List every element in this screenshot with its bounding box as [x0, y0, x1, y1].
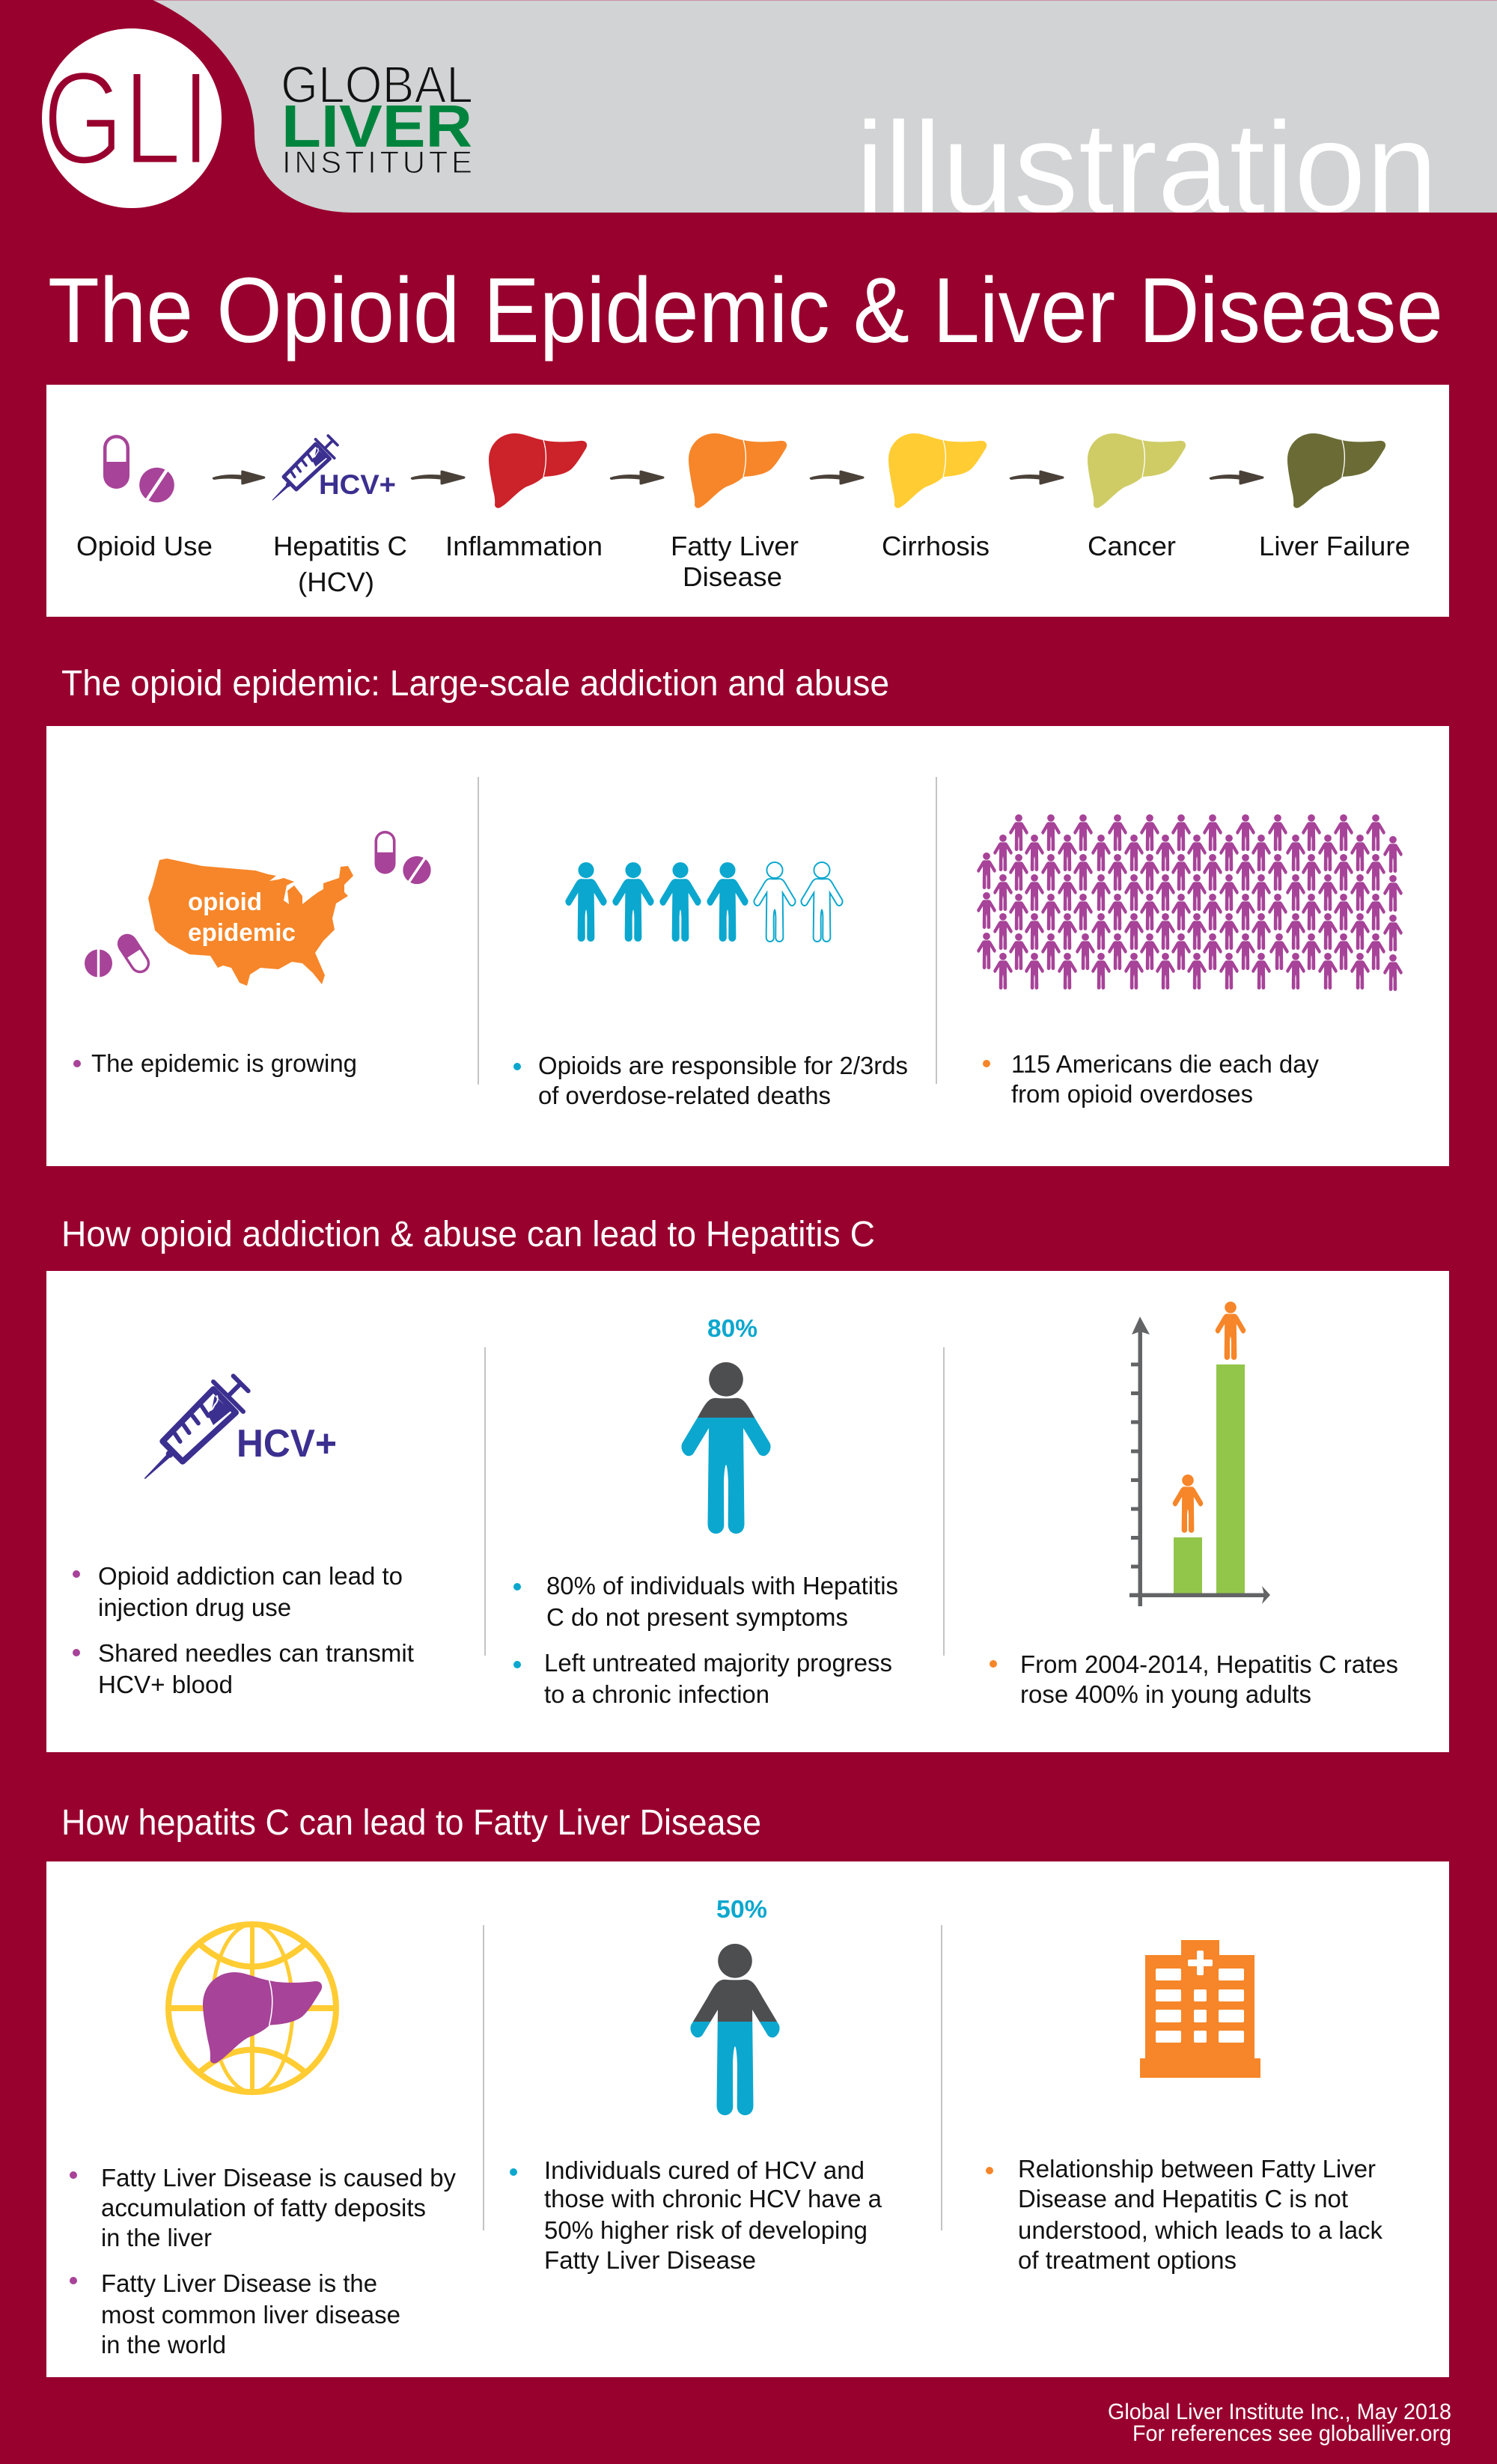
arrow: [1010, 472, 1063, 484]
map: USA with label: opioid: [188, 888, 262, 915]
label: hepatitis C: (HCV): [298, 567, 374, 597]
text: treatment options: Disease and Hepatitis C is not: [1018, 2185, 1348, 2213]
text: chronic infection: to a chronic infection: [544, 1680, 769, 1708]
text: injection drug use: Opioid addiction can lead to: [98, 1562, 403, 1590]
logo wordmark: Global Liver Institute: INSTITUTE: [282, 144, 472, 180]
header band: [153, 0, 1497, 213]
text: chronic infection: Left untreated majority progress: [544, 1649, 892, 1677]
map: USA with label: epidemic: [188, 918, 296, 946]
label: cancer: Cancer: [1088, 531, 1176, 561]
text: epidemic growing: The epidemic is growing: [91, 1049, 357, 1077]
text: 400% rise: [990, 1650, 1398, 1708]
icon: syringe HCV+: HCV+: [319, 469, 396, 500]
text: most common: [70, 2269, 400, 2358]
text: most common: in the world: [101, 2331, 226, 2358]
illustration word: illustration: [856, 94, 1438, 240]
arrow: [411, 472, 464, 484]
footer credits: For references see globalliver.org: [1132, 2421, 1451, 2446]
icon: dark liver: [1287, 433, 1385, 508]
label: cirrhosis: Cirrhosis: [882, 531, 990, 561]
panel: hepatitis C: [46, 1271, 1449, 1752]
label: fatty liver disease: [671, 531, 799, 592]
icon: yellow liver: [888, 433, 987, 508]
heading: opioid epidemic: The opioid epidemic: Large-scale addiction and abuse: [61, 664, 889, 704]
label: fatty liver disease: Disease: [683, 561, 782, 592]
icon: syringe HCV+: HCV+: [237, 1422, 337, 1466]
chart: rising hepatitis C rates: [1129, 1302, 1270, 1606]
heading: hepatitis C: How opioid addiction & abuse can lead to Hepatitis C: [61, 1215, 875, 1254]
stat: 50%: 50%: [716, 1895, 767, 1923]
icon: person 50% filled: [690, 1944, 780, 2115]
heading: fatty liver: How hepatits C can lead to Fatty Liver Disease: [61, 1803, 761, 1843]
text: chronic infection: [513, 1649, 892, 1708]
label: hepatitis C: Hepatitis C: [273, 531, 407, 561]
text: 400% rise: rose 400% in young adults: [1020, 1680, 1311, 1708]
text: injection drug use: injection drug use: [98, 1594, 291, 1621]
panel: disease progression: [46, 385, 1449, 617]
text: 80% no symptoms: 80% of individuals with Hepatitis: [546, 1572, 898, 1600]
text: 50% higher risk: 50% higher risk of developing: [544, 2216, 868, 2244]
icon: globe with liver: [168, 1924, 336, 2092]
icon: pale liver: [1088, 433, 1186, 508]
text: 50% higher risk: those with chronic HCV have a: [544, 2185, 882, 2213]
GLI logo circle: GLI: [43, 43, 210, 192]
label: hepatitis C: [273, 531, 407, 597]
label: opioid use: Opioid Use: [76, 531, 213, 561]
icon: syringe HCV+: [272, 436, 396, 501]
text: fatty deposits: in the liver: [101, 2224, 212, 2251]
text: shared needles: Shared needles can transmit: [98, 1639, 414, 1667]
panel: opioid epidemic: [46, 726, 1449, 1166]
text: injection drug use: [73, 1562, 403, 1621]
icon: pills upper right: [374, 831, 431, 884]
arrow: [810, 472, 863, 484]
footer credits: Global Liver Institute Inc., May 2018: [1108, 2400, 1451, 2424]
text: treatment options: understood, which leads to a lack: [1018, 2216, 1382, 2244]
text: fatty deposits: [70, 2164, 456, 2251]
text: treatment options: of treatment options: [1018, 2246, 1237, 2274]
label: liver failure: Liver Failure: [1259, 531, 1410, 561]
label: inflammation: Inflammation: [445, 531, 603, 561]
arrow: [610, 472, 663, 484]
icon: red liver: [489, 433, 587, 508]
text: treatment options: [986, 2155, 1382, 2274]
text: fatty deposits: Fatty Liver Disease is caused by: [101, 2164, 456, 2192]
text: shared needles: HCV+ blood: [98, 1671, 233, 1698]
text: 50% higher risk: Fatty Liver Disease: [544, 2246, 756, 2274]
icon: orange liver: [689, 433, 787, 508]
text: 80% no symptoms: [513, 1572, 898, 1631]
map: USA with label: [148, 859, 353, 986]
icon: six people, four filled: [565, 862, 843, 942]
logo wordmark: Global Liver Institute: GLOBAL: [281, 55, 473, 114]
text: 115 Americans: 115 Americans die each day: [1011, 1050, 1319, 1078]
label: fatty liver disease: Fatty Liver: [671, 531, 799, 561]
text: 115 Americans: from opioid overdoses: [1011, 1080, 1253, 1108]
footer credits: [1108, 2400, 1451, 2446]
text: 50% higher risk: [510, 2156, 882, 2274]
text: 80% no symptoms: C do not present symptoms: [546, 1603, 848, 1631]
text: 400% rise: From 2004-2014, Hepatitis C rates: [1020, 1650, 1398, 1678]
text: 50% higher risk: Individuals cured of HCV and: [544, 2156, 865, 2184]
text: overdose deaths: [513, 1052, 908, 1109]
logo wordmark: Global Liver Institute: [281, 55, 473, 180]
icon: pills: [103, 435, 174, 502]
text: overdose deaths: of overdose-related deaths: [538, 1082, 831, 1109]
arrow: [213, 472, 264, 484]
icon: syringe HCV+: [144, 1376, 337, 1479]
logo wordmark: Global Liver Institute: LIVER: [281, 93, 472, 159]
text: shared needles: [73, 1639, 414, 1698]
icon: crowd of people: [977, 814, 1403, 991]
arrow: [1210, 472, 1263, 484]
text: 115 Americans: [983, 1050, 1319, 1108]
text: treatment options: Relationship between Fatty Liver: [1018, 2155, 1376, 2183]
stat: 80%: 80%: [707, 1314, 757, 1342]
text: fatty deposits: accumulation of fatty deposits: [101, 2194, 426, 2221]
text: most common: most common liver disease: [101, 2301, 400, 2329]
panel: fatty liver disease: [46, 1861, 1449, 2377]
icon: pills lower left: [85, 930, 153, 978]
icon: hospital: [1140, 1940, 1260, 2078]
icon: person 80% filled: [681, 1362, 771, 1534]
text: overdose deaths: Opioids are responsible for 2/3rds: [538, 1052, 908, 1079]
text: most common: Fatty Liver Disease is the: [101, 2269, 377, 2297]
